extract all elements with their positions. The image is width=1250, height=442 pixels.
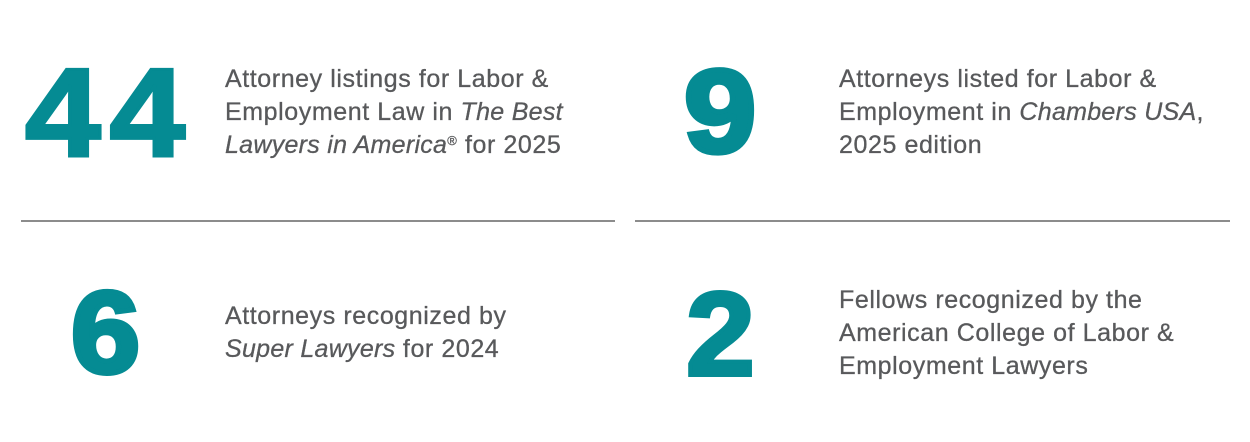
number 6: 6 bbox=[71, 268, 140, 398]
text: Super Lawyers: Super Lawyers for 2024 bbox=[225, 335, 499, 363]
number 44 bbox=[25, 42, 185, 183]
text: Chambers USA listings: Attorneys listed for Labor & bbox=[839, 65, 1157, 93]
divider left bbox=[21, 220, 615, 222]
text: Fellows bbox=[838, 286, 1174, 380]
number 44: 4 bbox=[110, 42, 185, 183]
number 2: 2 bbox=[686, 267, 755, 400]
number 44: 4 bbox=[25, 42, 101, 183]
divider right bbox=[635, 220, 1230, 222]
text: Best Lawyers listings: Employment Law in The Best bbox=[225, 98, 563, 126]
number 9: 9 bbox=[684, 46, 756, 178]
text: Best Lawyers listings bbox=[224, 65, 564, 159]
text: Super Lawyers bbox=[224, 302, 507, 363]
text: Best Lawyers listings: Attorney listings for Labor & bbox=[225, 65, 549, 93]
text: Best Lawyers listings: Lawyers in America® for 2025 bbox=[225, 131, 561, 159]
text: Chambers USA listings bbox=[838, 65, 1204, 159]
text: Fellows: Fellows recognized by the bbox=[839, 286, 1143, 314]
text: Chambers USA listings: 2025 edition bbox=[839, 131, 982, 159]
text: Super Lawyers: Attorneys recognized by bbox=[225, 302, 507, 330]
text: Chambers USA listings: Employment in Chambers USA, bbox=[839, 98, 1204, 126]
text: Fellows: Employment Lawyers bbox=[839, 352, 1088, 380]
text: Fellows: American College of Labor & bbox=[839, 319, 1174, 347]
